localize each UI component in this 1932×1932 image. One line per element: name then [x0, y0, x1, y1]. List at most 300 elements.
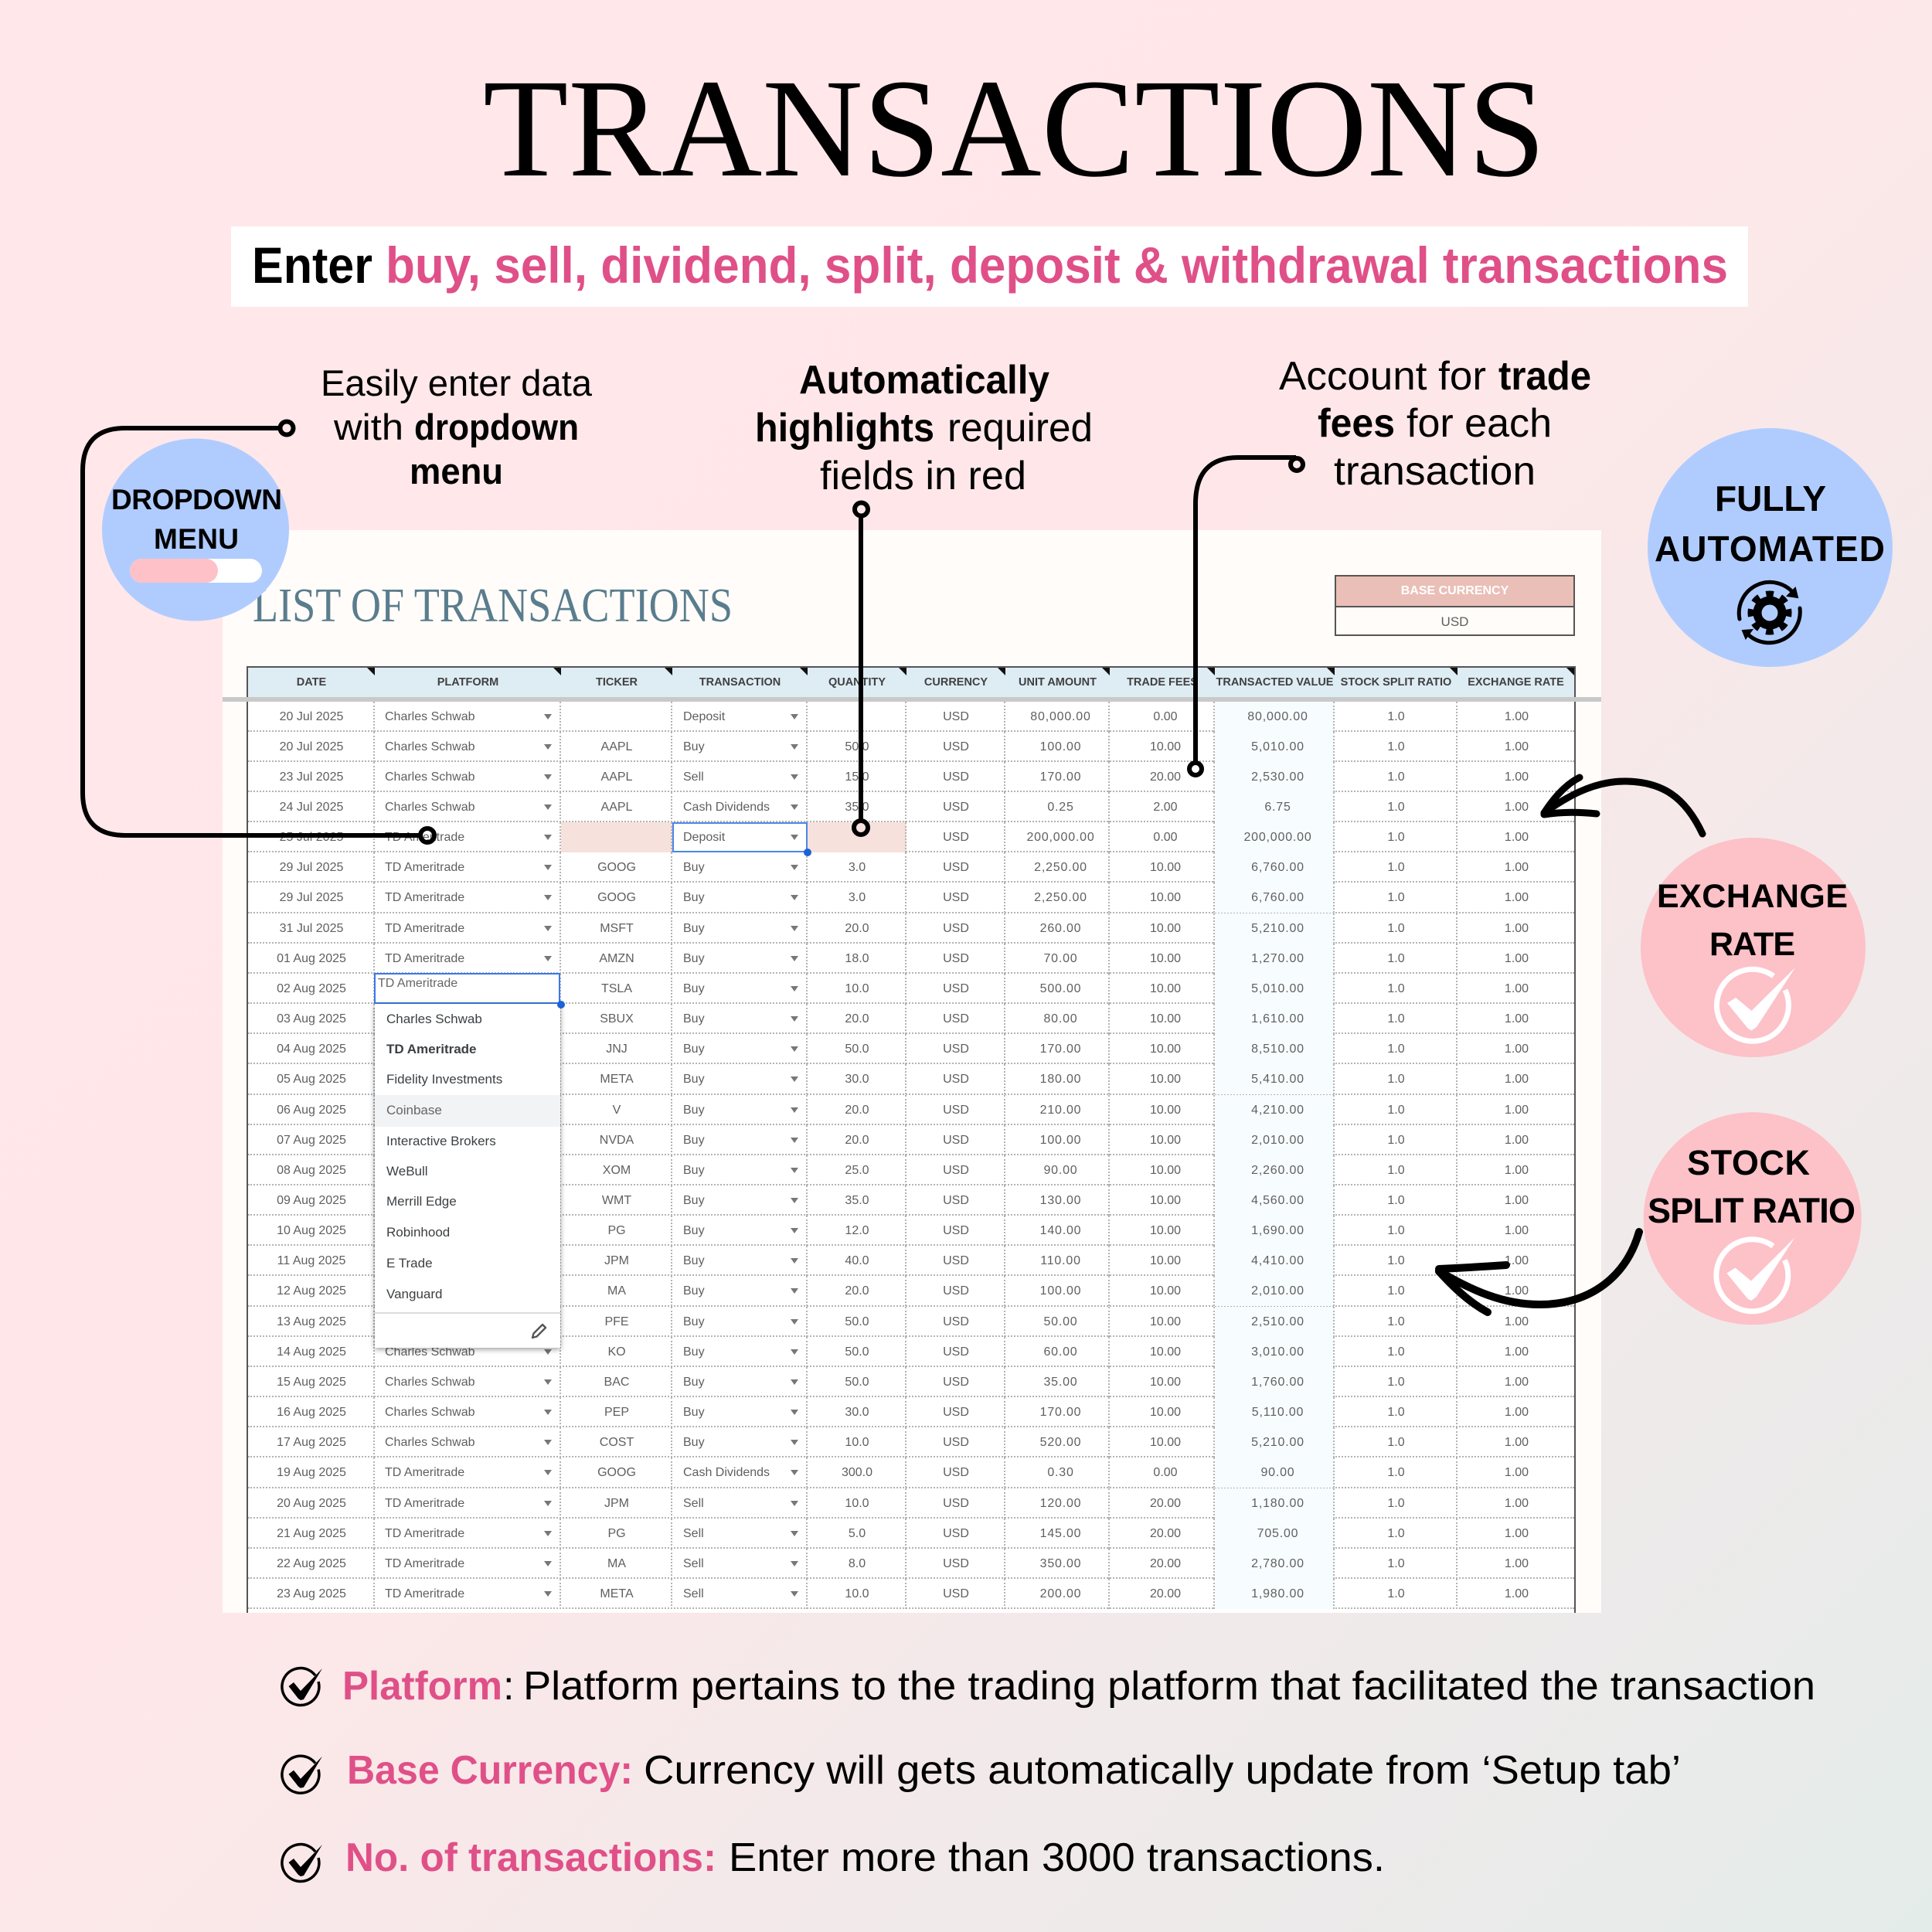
transactions table: 1.0 — [1387, 1557, 1405, 1570]
transactions table: 1.00 — [1505, 1254, 1529, 1267]
transactions table: 8.0 — [849, 1557, 866, 1570]
title: TRANSACTIONS — [483, 51, 1546, 206]
transactions table: TD Ameritrade — [385, 1134, 464, 1147]
transactions table: 10.00 — [1150, 861, 1181, 874]
dropdown menu: Fidelity Investments — [386, 1072, 502, 1087]
transactions table: 35.0 — [845, 1194, 869, 1207]
transactions table: Charles Schwab — [385, 1406, 474, 1419]
transactions table: Buy — [683, 1284, 705, 1298]
transactions table: 10.00 — [1150, 1254, 1181, 1267]
transactions table: USD — [943, 891, 969, 904]
callout line: highlighted fields — [854, 502, 868, 835]
transactions table: Sell — [683, 1587, 704, 1600]
transactions table: Charles Schwab — [385, 1345, 474, 1359]
transactions table: 2,780.00 — [1251, 1557, 1304, 1570]
transactions table: 1.0 — [1387, 1466, 1405, 1479]
active dropdown cell: TD Ameritrade — [378, 977, 457, 990]
active dropdown cell — [374, 973, 560, 1004]
transactions table: 1.0 — [1387, 801, 1405, 814]
table header row: UNIT AMOUNT — [1019, 676, 1097, 689]
transactions table: TD Ameritrade — [385, 952, 464, 965]
transactions table: 1.00 — [1505, 1527, 1529, 1540]
transactions table: TD Ameritrade — [385, 891, 464, 904]
caption: trade fees: transaction — [1334, 449, 1536, 494]
transactions table: 300.0 — [842, 1466, 872, 1479]
transactions table: 80.00 — [1043, 1012, 1078, 1026]
dropdown menu: TD Ameritrade — [386, 1042, 477, 1056]
transactions table: Buy — [683, 1345, 705, 1359]
transactions table: V — [613, 1104, 621, 1117]
bullet: number of transactions: No. of transactions: — [345, 1835, 716, 1880]
transactions table: 20.00 — [1150, 1557, 1181, 1570]
transactions table: 10.00 — [1150, 1073, 1181, 1086]
caption: highlights required fields: fields in red — [820, 454, 1026, 498]
highlighted row with required fields in red: 200,000.00 — [1026, 831, 1095, 844]
transactions table: 1.0 — [1387, 891, 1405, 904]
transactions table: GOOG — [597, 861, 636, 874]
transactions table: AAPL — [601, 740, 632, 753]
transactions table: 2,250.00 — [1034, 891, 1087, 904]
transactions table: 20.0 — [845, 1134, 869, 1147]
transactions table: USD — [943, 952, 969, 965]
transactions table: 1,610.00 — [1251, 1012, 1304, 1026]
transactions table: AMZN — [599, 952, 634, 965]
transactions table: 20.00 — [1150, 1587, 1181, 1600]
transactions table: Cash Dividends — [683, 801, 770, 814]
transactions table: Deposit — [683, 709, 725, 723]
transactions table: 5,010.00 — [1251, 740, 1304, 753]
transactions table: 110.00 — [1040, 1254, 1081, 1267]
transactions table: 1.00 — [1505, 1284, 1529, 1298]
transactions table: Buy — [683, 1134, 705, 1147]
transactions table: Buy — [683, 861, 705, 874]
transactions table: TD Ameritrade — [385, 1466, 464, 1479]
transactions table: Buy — [683, 982, 705, 995]
transactions table: 20.00 — [1150, 1527, 1181, 1540]
transactions table: 1.00 — [1505, 1164, 1529, 1177]
transactions table: 2,010.00 — [1251, 1134, 1304, 1147]
transactions table: 1.0 — [1387, 1073, 1405, 1086]
transactions table: TD Ameritrade — [385, 1527, 464, 1540]
transactions table: USD — [943, 740, 969, 753]
dropdown menu: Interactive Brokers — [386, 1134, 496, 1148]
transactions table: 50.0 — [845, 1315, 869, 1328]
table header row: EXCHANGE RATE — [1468, 676, 1564, 689]
transactions table: 10.00 — [1150, 1164, 1181, 1177]
transactions table: Buy — [683, 1406, 705, 1419]
caption: dropdown menu: Easily enter data — [321, 362, 593, 403]
transactions table: 100.00 — [1040, 1134, 1081, 1147]
transactions table: 2,250.00 — [1034, 861, 1087, 874]
transactions table: 130.00 — [1040, 1194, 1081, 1207]
transactions table: Charles Schwab — [385, 801, 474, 814]
transactions table: PEP — [604, 1406, 629, 1419]
transactions table: GOOG — [597, 1466, 636, 1479]
transactions table: USD — [943, 1194, 969, 1207]
transactions table: 1.00 — [1505, 740, 1529, 753]
transactions table: 01 Aug 2025 — [277, 952, 346, 965]
transactions table: 1.00 — [1505, 1466, 1529, 1479]
transactions table: 20.0 — [845, 922, 869, 935]
transactions table: 1.00 — [1505, 1134, 1529, 1147]
transactions table: 2,530.00 — [1251, 770, 1304, 784]
transactions table: 50.0 — [845, 1345, 869, 1359]
subtitle banner: buy, sell, dividend, split, deposit & withdrawal transactions — [386, 236, 1728, 294]
subtitle banner: Enter — [252, 236, 372, 294]
transactions table: AAPL — [601, 801, 632, 814]
transactions table: TD Ameritrade — [385, 1043, 464, 1056]
transactions table: USD — [943, 1073, 969, 1086]
transactions table: Buy — [683, 891, 705, 904]
transactions table: 12 Aug 2025 — [277, 1284, 346, 1298]
transactions table: 50.00 — [1043, 1315, 1078, 1328]
transactions table: USD — [943, 1254, 969, 1267]
transactions table: TD Ameritrade — [385, 1254, 464, 1267]
transactions table: 90.00 — [1260, 1466, 1295, 1479]
transactions table: 20.00 — [1150, 770, 1181, 784]
table header row: PLATFORM — [437, 676, 498, 689]
transactions table: XOM — [603, 1164, 631, 1177]
transactions table: Charles Schwab — [385, 1436, 474, 1449]
transactions table: Buy — [683, 1436, 705, 1449]
transactions table: Charles Schwab — [385, 709, 474, 723]
transactions table: 10.00 — [1150, 1043, 1181, 1056]
transactions table: TD Ameritrade — [385, 1497, 464, 1510]
transactions table: 200.00 — [1040, 1587, 1081, 1600]
icon: check — [282, 1845, 322, 1882]
bullet: platform: : — [503, 1664, 514, 1709]
transactions table: 29 Jul 2025 — [280, 861, 343, 874]
transactions table: 10.00 — [1150, 1012, 1181, 1026]
transactions table: 210.00 — [1040, 1104, 1081, 1117]
transactions table: 1.00 — [1505, 801, 1529, 814]
bullet: platform: Platform pertains to the trading platform that facilitated the transaction — [523, 1664, 1815, 1709]
transactions table: 60.00 — [1043, 1345, 1078, 1359]
dropdown menu: Robinhood — [386, 1225, 450, 1240]
transactions table: Buy — [683, 1224, 705, 1237]
transactions table: 1.00 — [1505, 952, 1529, 965]
transactions table: 6,760.00 — [1251, 891, 1304, 904]
transactions table: Sell — [683, 770, 704, 784]
transactions table: MA — [607, 1284, 626, 1298]
caption: highlights required fields: required — [947, 406, 1093, 451]
caption: highlights required fields: highlights — [755, 406, 934, 451]
transactions table: 10.00 — [1150, 740, 1181, 753]
transactions table: TD Ameritrade — [385, 1073, 464, 1086]
table header row: TRANSACTED VALUE — [1216, 676, 1333, 689]
transactions table: 18.0 — [845, 952, 869, 965]
icon: pencil — [532, 1323, 547, 1338]
transactions table: 1.0 — [1387, 1345, 1405, 1359]
transactions table: USD — [943, 1315, 969, 1328]
transactions table: 10.00 — [1150, 952, 1181, 965]
transactions table: USD — [943, 1134, 969, 1147]
transactions table: GOOG — [597, 891, 636, 904]
transactions table: 1.00 — [1505, 1376, 1529, 1389]
transactions table: 09 Aug 2025 — [277, 1194, 346, 1207]
badge: stock split ratio: SPLIT RATIO — [1648, 1191, 1855, 1230]
transactions table: 4,560.00 — [1251, 1194, 1304, 1207]
transactions table: 23 Aug 2025 — [277, 1587, 346, 1600]
transactions table: 1.0 — [1387, 1104, 1405, 1117]
transactions table: 15 Aug 2025 — [277, 1376, 346, 1389]
transactions table: TD Ameritrade — [385, 922, 464, 935]
badge: fully automated: AUTOMATED — [1655, 529, 1885, 569]
dropdown menu: E Trade — [386, 1256, 433, 1270]
transactions table: 1.00 — [1505, 1104, 1529, 1117]
transactions table: 10.0 — [845, 982, 869, 995]
transactions table: 1.00 — [1505, 1073, 1529, 1086]
transactions table: 8,510.00 — [1251, 1043, 1304, 1056]
transactions table: 1.0 — [1387, 1254, 1405, 1267]
bullet: base currency: Base Currency: — [347, 1748, 633, 1793]
transactions table: 14 Aug 2025 — [277, 1345, 346, 1359]
transactions table: 25.0 — [845, 1164, 869, 1177]
transactions table: Cash Dividends — [683, 1466, 770, 1479]
transactions table: 03 Aug 2025 — [277, 1012, 346, 1026]
transactions table: 20 Jul 2025 — [280, 709, 343, 723]
transactions table: USD — [943, 1527, 969, 1540]
caption: trade fees: for each — [1406, 401, 1552, 446]
caption: trade fees: fees — [1318, 401, 1395, 446]
transactions table: 20 Aug 2025 — [277, 1497, 346, 1510]
transactions table: JPM — [604, 1254, 629, 1267]
transactions table: 0.00 — [1153, 709, 1178, 723]
transactions table: 12.0 — [845, 1224, 869, 1237]
transactions table: 1.00 — [1505, 922, 1529, 935]
highlighted row with required fields in red: 1.00 — [1505, 831, 1529, 844]
caption: highlights required fields — [755, 358, 1093, 498]
transactions table: JPM — [604, 1497, 629, 1510]
badge: dropdown menu — [102, 439, 289, 621]
transactions table: TD Ameritrade — [385, 1104, 464, 1117]
transactions table: USD — [943, 1436, 969, 1449]
highlighted row with required fields in red: USD — [943, 831, 969, 844]
transactions table: 10.00 — [1150, 1134, 1181, 1147]
transactions table: 24 Jul 2025 — [280, 801, 343, 814]
transactions table: 1.00 — [1505, 770, 1529, 784]
transactions table: 17 Aug 2025 — [277, 1436, 346, 1449]
arrow: stock split ratio — [1439, 1232, 1639, 1312]
transactions table: 2,510.00 — [1251, 1315, 1304, 1328]
transactions table: 1.0 — [1387, 1194, 1405, 1207]
table header row: CURRENCY — [924, 676, 988, 689]
transactions table: TD Ameritrade — [385, 861, 464, 874]
transactions table: MSFT — [600, 922, 634, 935]
transactions table: USD — [943, 1406, 969, 1419]
transactions table: 1.0 — [1387, 1497, 1405, 1510]
transactions table: 10.0 — [845, 1497, 869, 1510]
base currency box: USD — [1441, 614, 1468, 629]
transactions table: 19 Aug 2025 — [277, 1466, 346, 1479]
dropdown menu: Merrill Edge — [386, 1194, 457, 1209]
transactions table: 4,210.00 — [1251, 1104, 1304, 1117]
transactions table: 1.0 — [1387, 1043, 1405, 1056]
transactions table: 2,260.00 — [1251, 1164, 1304, 1177]
transactions table: 21 Aug 2025 — [277, 1527, 346, 1540]
transactions table: 10.00 — [1150, 1436, 1181, 1449]
transactions table: USD — [943, 861, 969, 874]
transactions table: 170.00 — [1040, 1043, 1081, 1056]
transactions table: 1.0 — [1387, 1587, 1405, 1600]
transactions table: PG — [607, 1224, 626, 1237]
badge: fully automated: FULLY — [1715, 478, 1826, 519]
transactions table: USD — [943, 709, 969, 723]
transactions table: 08 Aug 2025 — [277, 1164, 346, 1177]
transactions table: 170.00 — [1040, 1406, 1081, 1419]
transactions table: 2,010.00 — [1251, 1284, 1304, 1298]
dropdown menu — [375, 1004, 560, 1348]
transactions table: 4,410.00 — [1251, 1254, 1304, 1267]
transactions table: COST — [600, 1436, 634, 1449]
transactions table: 10.0 — [845, 1436, 869, 1449]
transactions table: 0.30 — [1047, 1466, 1074, 1479]
transactions table: 10 Aug 2025 — [277, 1224, 346, 1237]
transactions table: 1.0 — [1387, 952, 1405, 965]
transactions table: 10.00 — [1150, 922, 1181, 935]
badge: stock split ratio: STOCK — [1687, 1143, 1810, 1182]
transactions table: 22 Aug 2025 — [277, 1557, 346, 1570]
table header row: QUANTITY — [828, 676, 886, 689]
table header row: TRANSACTION — [699, 676, 781, 689]
badge: exchange rate: EXCHANGE — [1657, 878, 1848, 915]
transactions table: 1.00 — [1505, 1345, 1529, 1359]
transactions table: Buy — [683, 922, 705, 935]
transactions table: TD Ameritrade — [385, 1194, 464, 1207]
transactions table: Buy — [683, 1104, 705, 1117]
caption: trade fees — [1279, 354, 1591, 494]
transactions table: Charles Schwab — [385, 770, 474, 784]
transactions table: USD — [943, 922, 969, 935]
transactions table: 06 Aug 2025 — [277, 1104, 346, 1117]
transactions table: 2.00 — [1153, 801, 1178, 814]
transactions table: 35.0 — [845, 801, 869, 814]
transactions table: 16 Aug 2025 — [277, 1406, 346, 1419]
transactions table: 100.00 — [1040, 1284, 1081, 1298]
transactions table: 6,760.00 — [1251, 861, 1304, 874]
transactions table: 350.00 — [1040, 1557, 1081, 1570]
transactions table: 50.0 — [845, 1043, 869, 1056]
transactions table: 1.0 — [1387, 770, 1405, 784]
callout line: trade fees — [1189, 457, 1303, 775]
transactions table: 10.00 — [1150, 1224, 1181, 1237]
transactions table: 40.0 — [845, 1254, 869, 1267]
transactions table: 120.00 — [1040, 1497, 1081, 1510]
transactions table: 1.0 — [1387, 922, 1405, 935]
transactions table: 705.00 — [1257, 1527, 1298, 1540]
transactions table: 1.0 — [1387, 1224, 1405, 1237]
transactions table: TD Ameritrade — [385, 1587, 464, 1600]
transactions table: 10.00 — [1150, 1345, 1181, 1359]
transactions table: 1.00 — [1505, 861, 1529, 874]
transactions table: SBUX — [600, 1012, 634, 1026]
highlighted row with required fields in red: 0.00 — [1153, 831, 1178, 844]
transactions table: 13 Aug 2025 — [277, 1315, 346, 1328]
transactions table: 145.00 — [1040, 1527, 1081, 1540]
transactions table: Buy — [683, 1194, 705, 1207]
transactions table: JNJ — [606, 1043, 628, 1056]
transactions table: 1.00 — [1505, 1012, 1529, 1026]
arrow: exchange rate — [1544, 777, 1702, 834]
transactions table: USD — [943, 1587, 969, 1600]
base currency box: BASE CURRENCY — [1401, 584, 1509, 597]
transactions table: 3.0 — [849, 861, 866, 874]
highlighted row with required fields in red: Deposit — [683, 831, 725, 844]
transactions table: NVDA — [600, 1134, 634, 1147]
transactions table: USD — [943, 1497, 969, 1510]
transactions table: 20.00 — [1150, 1497, 1181, 1510]
transactions table: 31 Jul 2025 — [280, 922, 343, 935]
transactions table: 1.0 — [1387, 1376, 1405, 1389]
transactions table: 500.00 — [1040, 982, 1081, 995]
transactions table: 1.0 — [1387, 709, 1405, 723]
dropdown menu: Charles Schwab — [386, 1012, 482, 1026]
transactions table: TD Ameritrade — [385, 1224, 464, 1237]
transactions table: 11 Aug 2025 — [277, 1254, 345, 1267]
transactions table: 10.00 — [1150, 1284, 1181, 1298]
transactions table: 50.0 — [845, 1376, 869, 1389]
transactions table: 5,110.00 — [1252, 1406, 1304, 1419]
highlighted row with required fields in red: 200,000.00 — [1243, 831, 1312, 844]
transactions table: 180.00 — [1040, 1073, 1081, 1086]
caption: dropdown menu: with — [333, 406, 403, 447]
callout line: dropdown — [83, 422, 434, 842]
icon: check — [282, 1668, 322, 1706]
badge: stock split ratio — [1644, 1112, 1862, 1325]
transactions table: 30.0 — [845, 1073, 869, 1086]
transactions table: 1.00 — [1505, 982, 1529, 995]
transactions table: 1.0 — [1387, 1284, 1405, 1298]
highlighted row with required fields in red: TD Ameritrade — [385, 831, 464, 844]
icon: gear with rotating arrows — [1739, 582, 1800, 643]
transactions table: 1.0 — [1387, 982, 1405, 995]
transactions table: TD Ameritrade — [385, 982, 464, 995]
transactions table: 1,980.00 — [1251, 1587, 1304, 1600]
badge: exchange rate: RATE — [1709, 926, 1795, 963]
transactions table: 520.00 — [1040, 1436, 1081, 1449]
transactions table: 20.0 — [845, 1012, 869, 1026]
transactions table: BAC — [604, 1376, 629, 1389]
transactions table: 0.25 — [1047, 801, 1074, 814]
transactions table: 260.00 — [1040, 922, 1081, 935]
transactions table: Buy — [683, 1012, 705, 1026]
base currency box — [1335, 575, 1575, 636]
caption: dropdown menu — [321, 362, 593, 492]
transactions table: AAPL — [601, 770, 632, 784]
transactions table: Buy — [683, 1164, 705, 1177]
transactions table: 80,000.00 — [1030, 709, 1091, 723]
icon: check — [282, 1756, 322, 1793]
transactions table: MA — [607, 1557, 626, 1570]
bullet: number of transactions — [282, 1835, 1385, 1882]
transactions table: 3,010.00 — [1251, 1345, 1304, 1359]
transactions table: Charles Schwab — [385, 740, 474, 753]
caption: dropdown menu: menu — [410, 451, 503, 492]
transactions table: Sell — [683, 1497, 704, 1510]
transactions table: 04 Aug 2025 — [277, 1043, 346, 1056]
transactions table: 100.00 — [1040, 740, 1081, 753]
badge: fully automated — [1648, 428, 1893, 667]
transactions table: 1.0 — [1387, 1012, 1405, 1026]
transactions table: USD — [943, 1043, 969, 1056]
transactions table: 5,010.00 — [1251, 982, 1304, 995]
transactions table: 50.0 — [845, 740, 869, 753]
transactions table: META — [600, 1073, 634, 1086]
transactions table: 15.0 — [845, 770, 869, 784]
transactions table: TSLA — [601, 982, 632, 995]
transactions table: 90.00 — [1043, 1164, 1078, 1177]
transactions table: USD — [943, 1012, 969, 1026]
